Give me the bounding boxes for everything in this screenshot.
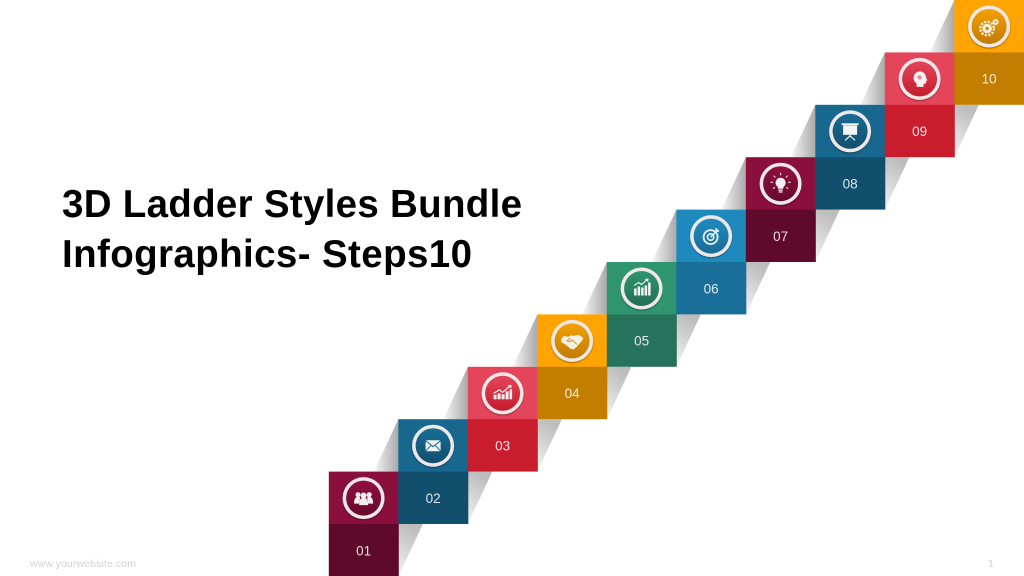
footer: website: www.yourwebsite.com — [29, 558, 136, 570]
footer: page number: 1 — [988, 558, 994, 570]
step 05: 05 — [634, 334, 649, 349]
icon: target — [704, 228, 719, 244]
step 01 — [329, 419, 423, 576]
step 10 — [954, 0, 1024, 105]
step 06 — [676, 157, 770, 314]
title — [62, 183, 522, 276]
icon: gears — [980, 19, 999, 35]
icon: light bulb — [771, 173, 791, 193]
step 01: 01 — [356, 543, 371, 558]
step 08 — [815, 52, 909, 210]
step 09 — [885, 0, 979, 157]
step 08: 08 — [843, 176, 858, 192]
step 06: 06 — [704, 281, 719, 296]
step 03: 03 — [495, 438, 510, 453]
step 04: 04 — [565, 386, 580, 401]
step 02 — [398, 367, 492, 524]
step 03 — [468, 314, 562, 472]
icon: envelope — [426, 440, 441, 451]
step 10: 10 — [982, 72, 997, 87]
step 07: 07 — [773, 229, 788, 244]
icon: handshake — [561, 335, 584, 349]
step 09: 09 — [912, 124, 927, 139]
step 02: 02 — [426, 491, 441, 506]
title: Infographics- Steps10 — [62, 233, 472, 276]
icon: growth chart — [634, 278, 651, 296]
icon: people — [354, 492, 373, 505]
step 05 — [607, 210, 701, 367]
step 04 — [537, 262, 631, 419]
icon: rising bar chart — [494, 385, 512, 399]
step 07 — [746, 105, 840, 262]
icon: head with gear — [914, 71, 928, 87]
title: 3D Ladder Styles Bundle — [62, 183, 522, 226]
icon: presentation board — [842, 123, 859, 140]
